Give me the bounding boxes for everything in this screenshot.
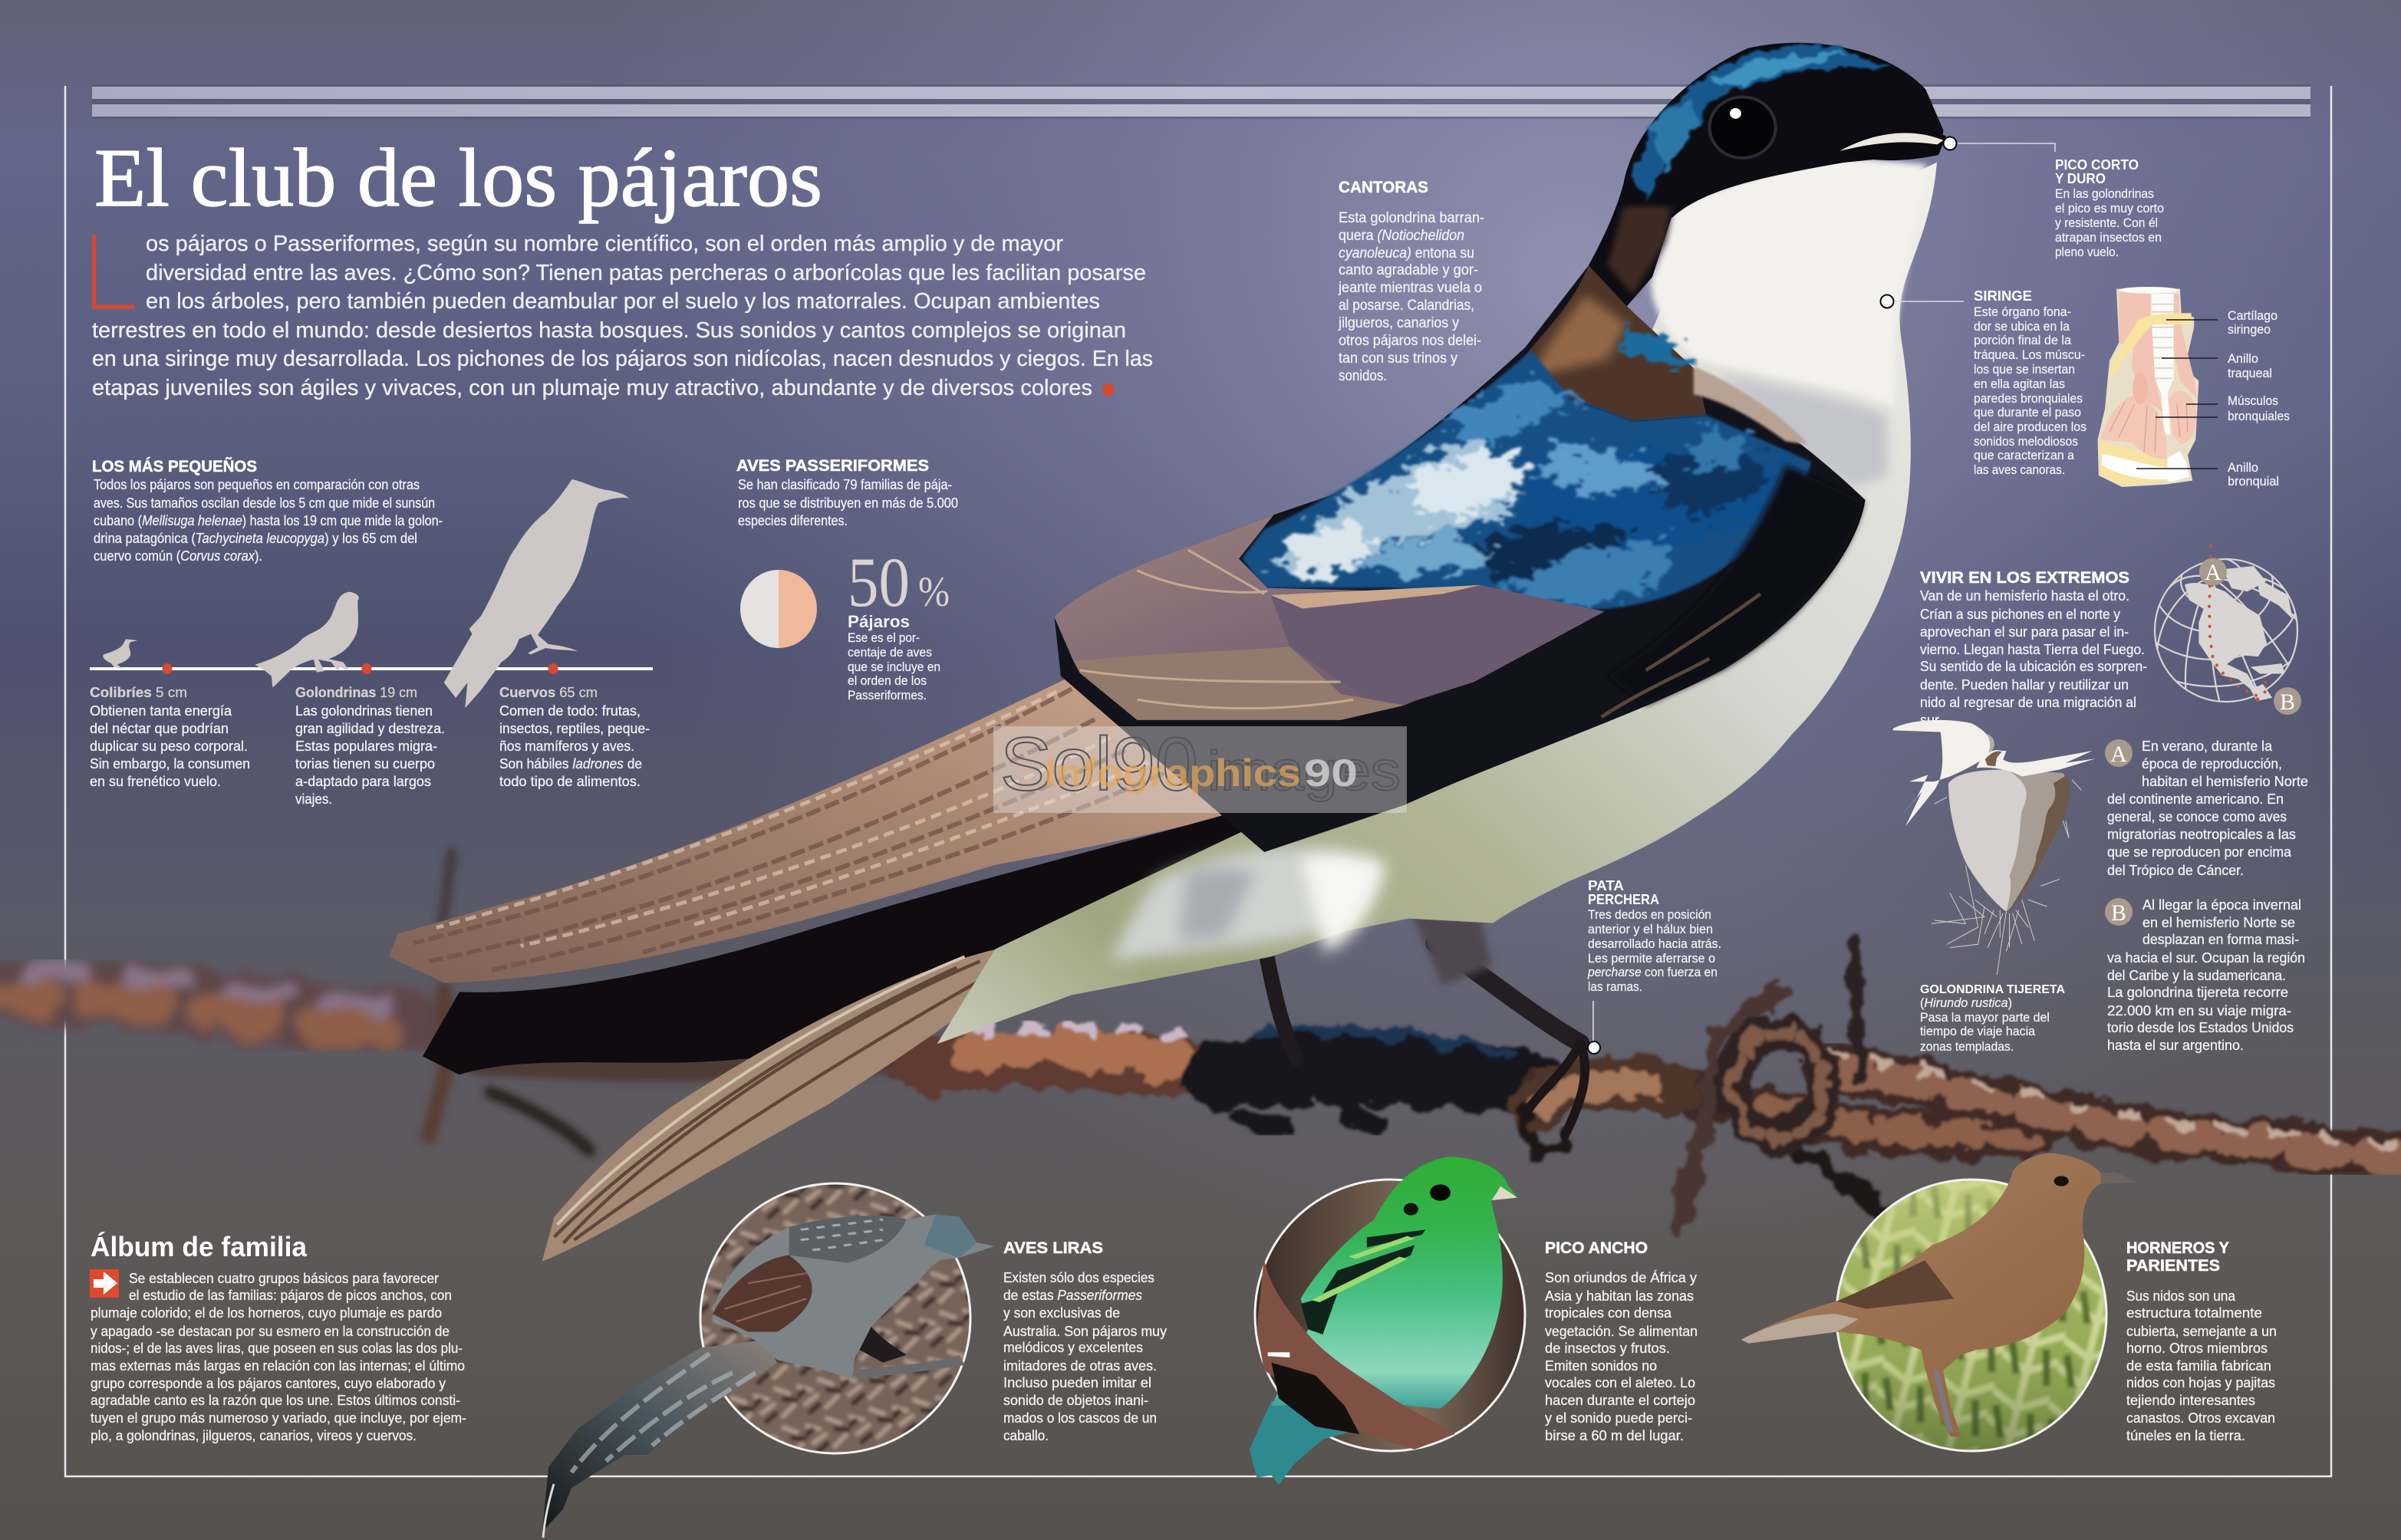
text block: horneros y parientes: Sus nidos son una: [2126, 1288, 2236, 1304]
note B: 22.000 km en su viaje migra-: [2107, 1003, 2291, 1018]
swallow lower body in display coordinates: [389, 163, 1937, 1262]
watermark: Infographics: [1044, 752, 1301, 795]
text block: aves liras: de estas Passeriformes: [1003, 1288, 1142, 1303]
stat 50%: [848, 543, 950, 621]
intro paragraph: os pájaros o Passeriformes, según su nombre científico, son el orden más amplio y de mayor: [146, 232, 1063, 256]
syrinx illustration: [2098, 287, 2198, 487]
broadbill branch and body: [1250, 1157, 1517, 1486]
text block: aves liras: sonido de objetos inani-: [1003, 1393, 1148, 1408]
caption: golondrina tijereta: GOLONDRINA TIJERETA: [1920, 983, 2065, 996]
column: colibríes: Obtienen tanta energía: [90, 703, 232, 719]
stat caption: centaje de aves: [848, 645, 932, 660]
text block: cantoras: CANTORAS: [1339, 179, 1428, 196]
syrinx labels: traqueal: [2228, 366, 2272, 380]
text block: pico ancho: vegetación. Se alimentan: [1545, 1324, 1698, 1339]
watermark: Sol90: [1000, 722, 1198, 806]
note A: migratorias neotropicales a las: [2107, 827, 2296, 842]
stat caption: Pájaros: [848, 612, 910, 631]
body text: [91, 1271, 466, 1443]
lower muscles: [2100, 396, 2167, 459]
intro paragraph: terrestres en todo el mundo: desde desiertos hasta bosques. Sus sonidos y cantos complejos se originan: [92, 318, 1126, 343]
heading: Álbum de familia: [91, 1231, 308, 1262]
callout: siringe: [1881, 288, 2086, 477]
column: cuervos: [499, 685, 650, 789]
watermark: images: [1207, 741, 1401, 802]
callout: siringe: sonidos melodiosos: [1974, 434, 2078, 449]
beak: [1492, 1186, 1517, 1200]
syrinx labels: bronquiales: [2228, 409, 2290, 423]
column: cuervos: ños mamíferos y aves.: [499, 739, 634, 754]
body text: drina patagónica (Tachycineta leucopyga) y los 65 cm del: [94, 531, 417, 546]
text block: horneros y parientes: tejiendo interesantes: [2126, 1393, 2255, 1408]
callout: siringe: los que se insertan: [1974, 362, 2075, 377]
watermark: [993, 722, 1407, 813]
note A: [2105, 739, 2308, 878]
throat white: [1651, 156, 1925, 406]
callout: pico corto y duro: el pico es muy corto: [2055, 201, 2164, 216]
chest band: [1694, 367, 1808, 444]
column: colibríes: duplicar su peso corporal.: [90, 739, 248, 754]
callout: pico corto y duro: PICO CORTO: [2055, 157, 2139, 173]
callout: siringe: porción final de la: [1974, 333, 2072, 347]
globe marker A: [2199, 558, 2227, 586]
globe marker A: A: [2205, 560, 2222, 585]
body text: vierno. Llegan hasta Tierra del Fuego.: [1920, 642, 2145, 657]
text block: aves liras: AVES LIRAS: [1003, 1239, 1103, 1257]
callout: pata perchera: PATA: [1588, 878, 1624, 893]
text block: aves liras: Australia. Son pájaros muy: [1003, 1324, 1167, 1339]
text block: pico ancho: [1545, 1239, 1698, 1443]
body text: nidos-; el de las aves liras, que poseen en sus colas las dos plu-: [91, 1341, 463, 1356]
body text: nido al regresar de una migración al: [1920, 695, 2136, 710]
intro paragraph: diversidad entre las aves. ¿Cómo son? Tienen patas percheras o arborícolas que les facilitan posarse: [146, 261, 1146, 285]
text block: cantoras: cyanoleuca) entona su: [1339, 245, 1474, 262]
stat 50%: 50: [848, 543, 910, 621]
icon: red arrow: [90, 1269, 119, 1298]
body text: el estudio de las familias: pájaros de picos anchos, con: [129, 1288, 452, 1303]
second swallow head: [1974, 734, 1994, 754]
text block: aves liras: [1003, 1239, 1167, 1443]
column: golondrinas: viajes.: [295, 791, 332, 807]
silhouette: hummingbird: [103, 639, 137, 669]
caption: golondrina tijereta: [1920, 983, 2065, 1054]
wire: blurred barbs at left: [429, 853, 951, 1150]
body text: aprovechan el sur para pasar el in-: [1920, 624, 2129, 640]
globe marker B: [2274, 687, 2301, 715]
caption: golondrina tijereta: zonas templadas.: [1920, 1039, 2014, 1054]
pie chart 50%: [740, 570, 817, 648]
wing stripes: [1301, 1229, 1425, 1334]
note B: Al llegar la época invernal: [2142, 897, 2301, 913]
column: golondrinas: Las golondrinas tienen: [295, 703, 433, 719]
text block: aves liras: imitadores de otras aves.: [1003, 1358, 1157, 1374]
perch line: [90, 667, 653, 670]
stat caption: el orden de los: [848, 673, 927, 688]
text block: pico ancho: Emiten sonidos no: [1545, 1358, 1657, 1374]
text block: aves liras: Incluso pueden imitar el: [1003, 1375, 1151, 1390]
column: golondrinas: Estas populares migra-: [295, 739, 437, 754]
callout marker: [1881, 295, 1964, 308]
illustration: barn swallow and nest: [1893, 720, 2096, 975]
hornero body: [1741, 1153, 2136, 1436]
text block: cantoras: jeante mientras vuela o: [1338, 280, 1482, 296]
text block: cantoras: quera (Notiochelidon: [1339, 228, 1464, 244]
panel: vivir en los extremos: [1893, 495, 2328, 1054]
column: colibríes: Colibríes 5 cm: [90, 685, 187, 700]
eye: [1709, 97, 1776, 158]
text block: pico ancho: de insectos y frutos.: [1545, 1341, 1670, 1356]
body text: sur.: [1920, 712, 1942, 728]
column: cuervos: Comen de todo: frutas,: [499, 703, 641, 719]
text block: pico ancho: hacen durante el cortejo: [1545, 1393, 1695, 1408]
caption: golondrina tijereta: tiempo de viaje hacia: [1920, 1024, 2036, 1038]
syrinx labels: Anillo: [2228, 460, 2258, 475]
callout: pico corto y duro: Y DURO: [2055, 171, 2106, 186]
text block: pico ancho: birse a 60 m del lugar.: [1545, 1428, 1684, 1443]
callout marker: [1588, 1001, 1600, 1054]
text block: cantoras: Esta golondrina barran-: [1339, 210, 1484, 226]
note B: B: [2111, 900, 2126, 926]
body text: cuervo común (Corvus corax).: [94, 548, 262, 564]
stat 50%: %: [918, 568, 950, 615]
text block: horneros y parientes: cubierta, semejante a un: [2126, 1324, 2277, 1339]
branch: [1256, 1258, 1455, 1450]
note A: que se reproducen por encima: [2107, 844, 2292, 860]
callout: siringe: las aves canoras.: [1974, 462, 2065, 477]
neck brown side of head: [1608, 207, 1671, 295]
text block: aves liras: y son exclusivas de: [1003, 1305, 1120, 1321]
diagram: syrinx anatomy: [2098, 287, 2290, 489]
panel: aves passeriformes: [736, 457, 958, 703]
lyrebird body: [713, 1214, 994, 1378]
note A: En verano, durante la: [2142, 739, 2273, 754]
primary wing feathers: [389, 661, 1347, 982]
silhouette: swallow: [255, 592, 359, 688]
syrinx labels: Cartílago: [2228, 308, 2277, 323]
body text: Todos los pájaros son pequeños en comparación con otras: [94, 477, 420, 492]
wire: left blurred segment: [0, 970, 430, 1041]
dark right shoulder: [1608, 465, 1863, 706]
heading: VIVIR EN LOS EXTREMOS: [1920, 569, 2129, 587]
eye: [1430, 1184, 1451, 1201]
body text: cubano (Mellisuga helenae) hasta los 19 cm que mide la golon-: [94, 513, 443, 528]
drop-cap L: [94, 235, 134, 307]
silhouette: raven: [444, 479, 629, 708]
body text: aves. Sus tamaños oscilan desde los 5 cm que mide el sunsún: [94, 495, 435, 511]
note A: del continente americano. En: [2107, 791, 2284, 807]
white undertail tuft: [1110, 848, 1385, 961]
nest body: [1948, 770, 2070, 912]
brown tail feather: [542, 946, 1010, 1262]
heading: AVES PASSERIFORMES: [736, 457, 929, 475]
syrinx labels: siringeo: [2228, 322, 2271, 337]
stat caption: que se incluye en: [848, 660, 940, 674]
callout: pata perchera: [1587, 878, 1721, 1054]
wire: barbs and knot: [1527, 942, 1883, 1222]
text block: pico ancho: y el sonido puede perci-: [1545, 1410, 1692, 1426]
text block: aves liras: Existen sólo dos especies: [1003, 1270, 1154, 1285]
note A: A: [2110, 742, 2127, 767]
callout: siringe: que caracterizan a: [1974, 448, 2074, 462]
note B: hasta el sur argentino.: [2107, 1038, 2244, 1053]
globe marker B: B: [2280, 689, 2295, 715]
callout: pico corto y duro: En las golondrinas: [2055, 186, 2154, 201]
stat caption: [848, 612, 940, 703]
body text: tuyen el grupo más numeroso y variado, que incluye, por ejem-: [91, 1410, 466, 1426]
column: golondrinas: [295, 685, 445, 807]
body text: mas externas más largas en relación con las internas; el último: [91, 1358, 465, 1374]
wire: right strands: [1534, 1052, 2401, 1166]
wing coverts mauve: [1055, 515, 1602, 717]
text block: cantoras: canto agradable y gor-: [1339, 262, 1478, 278]
trachea: [2152, 294, 2174, 435]
migration route dots: [2209, 546, 2267, 703]
text block: pico ancho: Asia y habitan las zonas: [1545, 1288, 1694, 1304]
text block: horneros y parientes: HORNEROS Y: [2126, 1239, 2229, 1257]
caption: golondrina tijereta: Pasa la mayor parte del: [1920, 1010, 2050, 1025]
nest dark shading: [2010, 775, 2070, 910]
column: golondrinas: a-daptado para largos: [295, 774, 431, 789]
body text: y apagado -se destacan por su esmero en la construcción de: [91, 1324, 450, 1339]
note A: del Trópico de Cáncer.: [2107, 863, 2244, 878]
syrinx labels: [2228, 308, 2290, 489]
title: El club de los pájaros: [94, 133, 822, 224]
bronchial rings: [2100, 443, 2169, 485]
callout: pico corto y duro: pleno vuelo.: [2055, 245, 2119, 259]
column: colibríes: del néctar que podrían: [90, 721, 229, 736]
note A: habitan el hemisferio Norte: [2142, 774, 2308, 789]
body text: Su sentido de la ubicación es sorpren-: [1920, 659, 2147, 674]
intro paragraph: etapas juveniles son ágiles y vivaces, con un plumaje muy atractivo, abundante y de diversos colores: [92, 376, 1092, 400]
callout: siringe: tráquea. Los múscu-: [1974, 347, 2085, 362]
callout: siringe: en ella agitan las: [1974, 377, 2065, 391]
callout: pata perchera: percharse con fuerza en: [1587, 965, 1718, 979]
body text: especies diferentes.: [738, 513, 848, 528]
panel: los más pequeños: [90, 458, 653, 807]
upper muscles: [2119, 291, 2150, 353]
note B: [2105, 897, 2305, 1053]
text block: horneros y parientes: PARIENTES: [2126, 1257, 2220, 1275]
main photo: swallow on the wire: [389, 43, 1946, 1262]
lower photo: green broadbill: [1250, 1157, 1525, 1486]
callout: pata perchera: PERCHERA: [1588, 892, 1659, 907]
head: [1589, 43, 1944, 307]
cartilage band: [2110, 313, 2192, 376]
callout: pata perchera: anterior y el hálux bien: [1588, 922, 1713, 936]
text block: horneros y parientes: nidos con hojas y pajitas: [2126, 1375, 2275, 1390]
neck blue spot: [1617, 324, 1691, 368]
body text: Van de un hemisferio hasta el otro.: [1920, 588, 2129, 604]
body text: [1920, 588, 2147, 728]
callout: pata perchera: Tres dedos en posición: [1588, 907, 1711, 922]
broadbill circle background: [1255, 1180, 1525, 1451]
iridescent highlights: [1270, 380, 1786, 609]
caption: golondrina tijereta: (Hirundo rustica): [1920, 995, 2012, 1010]
column: golondrinas: gran agilidad y destreza.: [295, 721, 445, 736]
note B: va hacia el sur. Ocupan la región: [2107, 950, 2305, 966]
syrinx labels: Músculos: [2228, 393, 2278, 408]
belly: [937, 163, 1937, 1044]
lower photo: lyrebird: [542, 1173, 994, 1538]
column: cuervos: Son hábiles ladrones de: [499, 756, 642, 772]
note B: La golondrina tijereta recorre: [2107, 985, 2288, 1000]
stat caption: Passeriformes.: [848, 688, 927, 703]
text block: aves liras: caballo.: [1003, 1428, 1049, 1443]
text block: horneros y parientes: túneles en la tierra.: [2126, 1428, 2245, 1443]
stat caption: Ese es el por-: [848, 630, 920, 645]
note A: general, se conoce como aves: [2107, 809, 2287, 824]
column: golondrinas: torias tienen su cuerpo: [295, 756, 435, 772]
callout: siringe: del aire producen los: [1974, 420, 2086, 434]
body text: Se establecen cuatro grupos básicos para favorecer: [129, 1271, 439, 1286]
callout: pico corto y duro: [1944, 137, 2164, 259]
chest grey: [1716, 374, 1888, 489]
syrinx leader lines: [2136, 320, 2218, 469]
note B: desplazan en forma masi-: [2142, 932, 2299, 947]
column: cuervos: Cuervos 65 cm: [499, 685, 598, 700]
beak: [1836, 127, 1946, 160]
text block: horneros y parientes: horno. Otros miembros: [2126, 1341, 2268, 1356]
body text: plumaje colorido; el de los horneros, cuyo plumaje es pardo: [91, 1305, 442, 1321]
lyrebird tail: [542, 1340, 777, 1538]
column: colibríes: Sin embargo, la consumen: [90, 756, 250, 772]
wire: middle rusty section: [921, 1028, 1542, 1127]
top double bars: [92, 84, 2310, 119]
swallow upper body, wing and head: [1055, 43, 1946, 852]
column: colibríes: [90, 685, 250, 789]
callout: pico corto y duro: y resistente. Con él: [2055, 216, 2158, 230]
side muscle: [2132, 324, 2162, 412]
text block: cantoras: otros pájaros nos delei-: [1339, 333, 1481, 349]
lower wing edge lines: [1602, 594, 1760, 717]
text block: pico ancho: PICO ANCHO: [1545, 1239, 1648, 1257]
note B: del Caribe y la sudamericana.: [2107, 968, 2286, 983]
body text: ros que se distribuyen en más de 5.000: [738, 495, 958, 511]
note B: torio desde los Estados Unidos: [2107, 1020, 2294, 1035]
body text: [94, 477, 443, 564]
hornero circle background: [1826, 1173, 2117, 1457]
wing dark base: [1055, 265, 1866, 852]
straw strands: [1932, 780, 2081, 975]
body text: plo, a golondrinas, jilgueros, canarios, vireos y cuervos.: [91, 1428, 417, 1443]
body text: Crían a sus pichones en el norte y: [1920, 607, 2120, 622]
column: golondrinas: Golondrinas 19 cm: [295, 685, 417, 700]
continents: [2185, 566, 2293, 701]
syrinx labels: Anillo: [2228, 351, 2258, 366]
callout: pata perchera: Les permite aferrarse o: [1588, 951, 1715, 966]
nest mid shading: [2006, 770, 2070, 912]
barbed wire: [0, 853, 2401, 1222]
callout: siringe: que durante el paso: [1974, 405, 2081, 420]
text block: horneros y parientes: canastos. Otros excavan: [2126, 1410, 2275, 1426]
callout: pata perchera: desarrollado hacia atrás.: [1588, 936, 1721, 951]
callout marker: [1944, 137, 2055, 152]
column: cuervos: todo tipo de alimentos.: [499, 774, 641, 789]
text block: aves liras: melódicos y excelentes: [1003, 1340, 1143, 1355]
perched swallow: [1977, 750, 2096, 776]
text block: pico ancho: tropicales con densa: [1545, 1305, 1672, 1321]
body text: agradable canto es la razón que los une. Estos últimos consti-: [91, 1393, 460, 1408]
lower photo: hornero: [1741, 1153, 2136, 1457]
column: colibríes: en su frenético vuelo.: [90, 774, 221, 789]
body text: dente. Pueden hallar y reutilizar un: [1920, 677, 2129, 693]
callout: siringe: SIRINGE: [1974, 288, 2032, 304]
note A: época de reproducción,: [2142, 756, 2282, 772]
text block: pico ancho: Son oriundos de África y: [1545, 1270, 1697, 1285]
text block: pico ancho: vocales con el aleteo. Lo: [1545, 1375, 1695, 1390]
red end mark: [1102, 383, 1115, 396]
callout: siringe: paredes bronquiales: [1974, 391, 2083, 406]
body text: grupo corresponde a los pájaros cantores, cuyo elaborado y: [91, 1376, 446, 1391]
callout: pico corto y duro: atrapan insectos en: [2055, 230, 2162, 245]
callout: siringe: dor se ubica en la: [1974, 319, 2070, 334]
flying swallow: [1893, 720, 1990, 826]
red size markers: [163, 663, 558, 674]
swallow legs: [1266, 913, 1585, 1135]
panel: álbum de familia: [90, 1231, 466, 1443]
text block: cantoras: al posarse. Calandrias,: [1339, 298, 1474, 314]
body text: [738, 477, 958, 528]
iridescent blue mantle: [1242, 350, 1811, 610]
globe with migration route: [2154, 545, 2301, 715]
tertial feather edges: [1073, 647, 1405, 720]
intro paragraph: en los árboles, pero también pueden deambular por el suelo y los matorrales. Ocupan ambientes: [146, 289, 1100, 314]
text block: cantoras: tan con sus trinos y: [1339, 350, 1457, 367]
text block: horneros y parientes: [2126, 1239, 2277, 1443]
heading: LOS MÁS PEQUEÑOS: [92, 458, 257, 475]
intro paragraph: en una siringe muy desarrollada. Los pichones de los pájaros son nidícolas, nacen desnudos y ciegos. En las: [92, 347, 1153, 371]
text block: cantoras: sonidos.: [1339, 368, 1387, 384]
text block: cantoras: [1338, 179, 1484, 384]
globe grid: [2098, 495, 2328, 706]
body text: Se han clasificado 79 familias de pája-: [738, 477, 952, 492]
lyrebird circle background: [690, 1173, 982, 1465]
neck brown: [1506, 265, 1706, 421]
callout: pata perchera: las ramas.: [1588, 979, 1642, 994]
body: [1271, 1157, 1517, 1409]
column: cuervos: insectos, reptiles, peque-: [499, 721, 650, 736]
syrinx labels: bronquial: [2228, 474, 2279, 489]
text block: horneros y parientes: de esta familia fabrican: [2126, 1358, 2271, 1374]
note B: en el hemisferio Norte se: [2142, 915, 2295, 930]
size silhouettes: [103, 479, 629, 708]
text block: horneros y parientes: estructura totalmente: [2126, 1305, 2262, 1321]
tail: [1250, 1401, 1352, 1486]
black undertail: [423, 799, 1302, 1074]
secondary coverts: [1270, 585, 1605, 709]
intro paragraph: [92, 232, 1153, 400]
text block: aves liras: mados o los cascos de un: [1003, 1410, 1157, 1426]
text block: cantoras: jilgueros, canarios y: [1338, 315, 1459, 331]
crown iridescent: [1633, 46, 1894, 207]
callout: siringe: Este órgano fona-: [1974, 304, 2071, 319]
watermark: 90: [1304, 752, 1358, 795]
